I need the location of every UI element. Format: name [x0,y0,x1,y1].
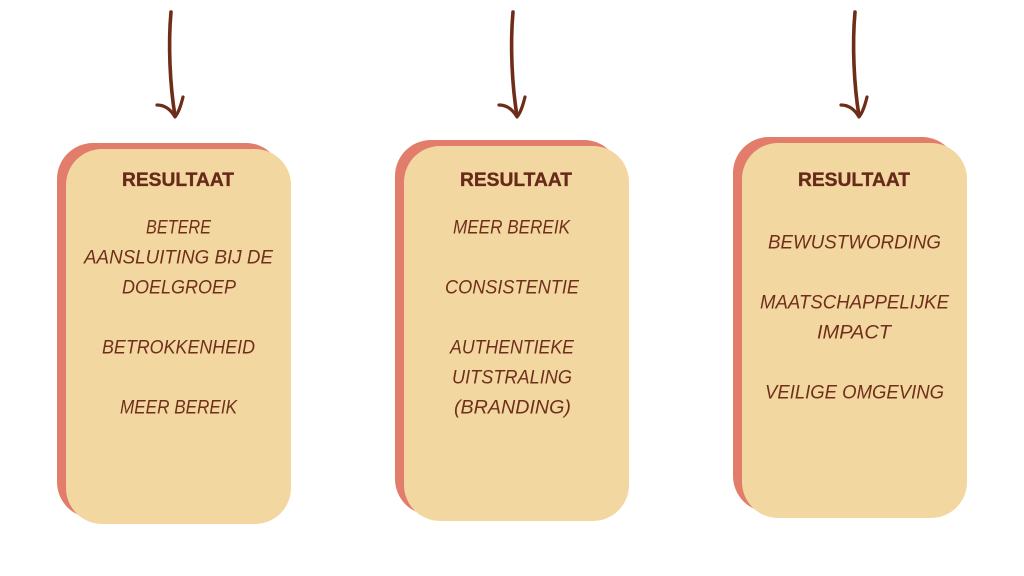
card 1 face [66,149,291,524]
card 3 results list: IMPACT [817,322,892,344]
arrow: column 3 [841,12,867,117]
card 2 results list: (BRANDING) [454,398,571,418]
card 2 results list: AUTHENTIEKE [449,338,574,358]
arrow: column 2 [499,12,525,117]
card 2 shadow [395,140,620,515]
card 1 results list: BETROKKENHEID [102,338,255,358]
arrow: column 1 [157,12,183,117]
card 1 shadow [57,143,282,518]
card 2 face [404,146,629,521]
card 2 results list [445,218,579,418]
card 3 results list: MAATSCHAPPELIJKE [760,292,949,314]
card 3 face [742,143,967,518]
card 3 results list: BEWUSTWORDING [768,232,941,254]
card 1 results list: BETERE [146,218,211,238]
card 2 heading: RESULTAAT [460,169,572,191]
card 1 results list: MEER BEREIK [120,398,238,418]
card 1 results list: DOELGROEP [122,278,236,298]
panel: result card 2 [395,140,629,521]
card 3 results list: VEILIGE OMGEVING [765,382,944,404]
card 2 results list: CONSISTENTIE [445,278,579,298]
card 1 heading: RESULTAAT [122,169,234,191]
panel: result card 3 [733,137,967,518]
panel: result card 1 [57,143,291,524]
card 3 shadow [733,137,958,512]
card 2 results list: UITSTRALING [452,368,572,388]
card 1 results list: AANSLUITING BIJ DE [83,248,273,268]
card 2 results list: MEER BEREIK [453,218,571,238]
card 1 results list [83,218,273,418]
card 3 results list [760,232,949,404]
card 3 heading: RESULTAAT [798,169,910,191]
